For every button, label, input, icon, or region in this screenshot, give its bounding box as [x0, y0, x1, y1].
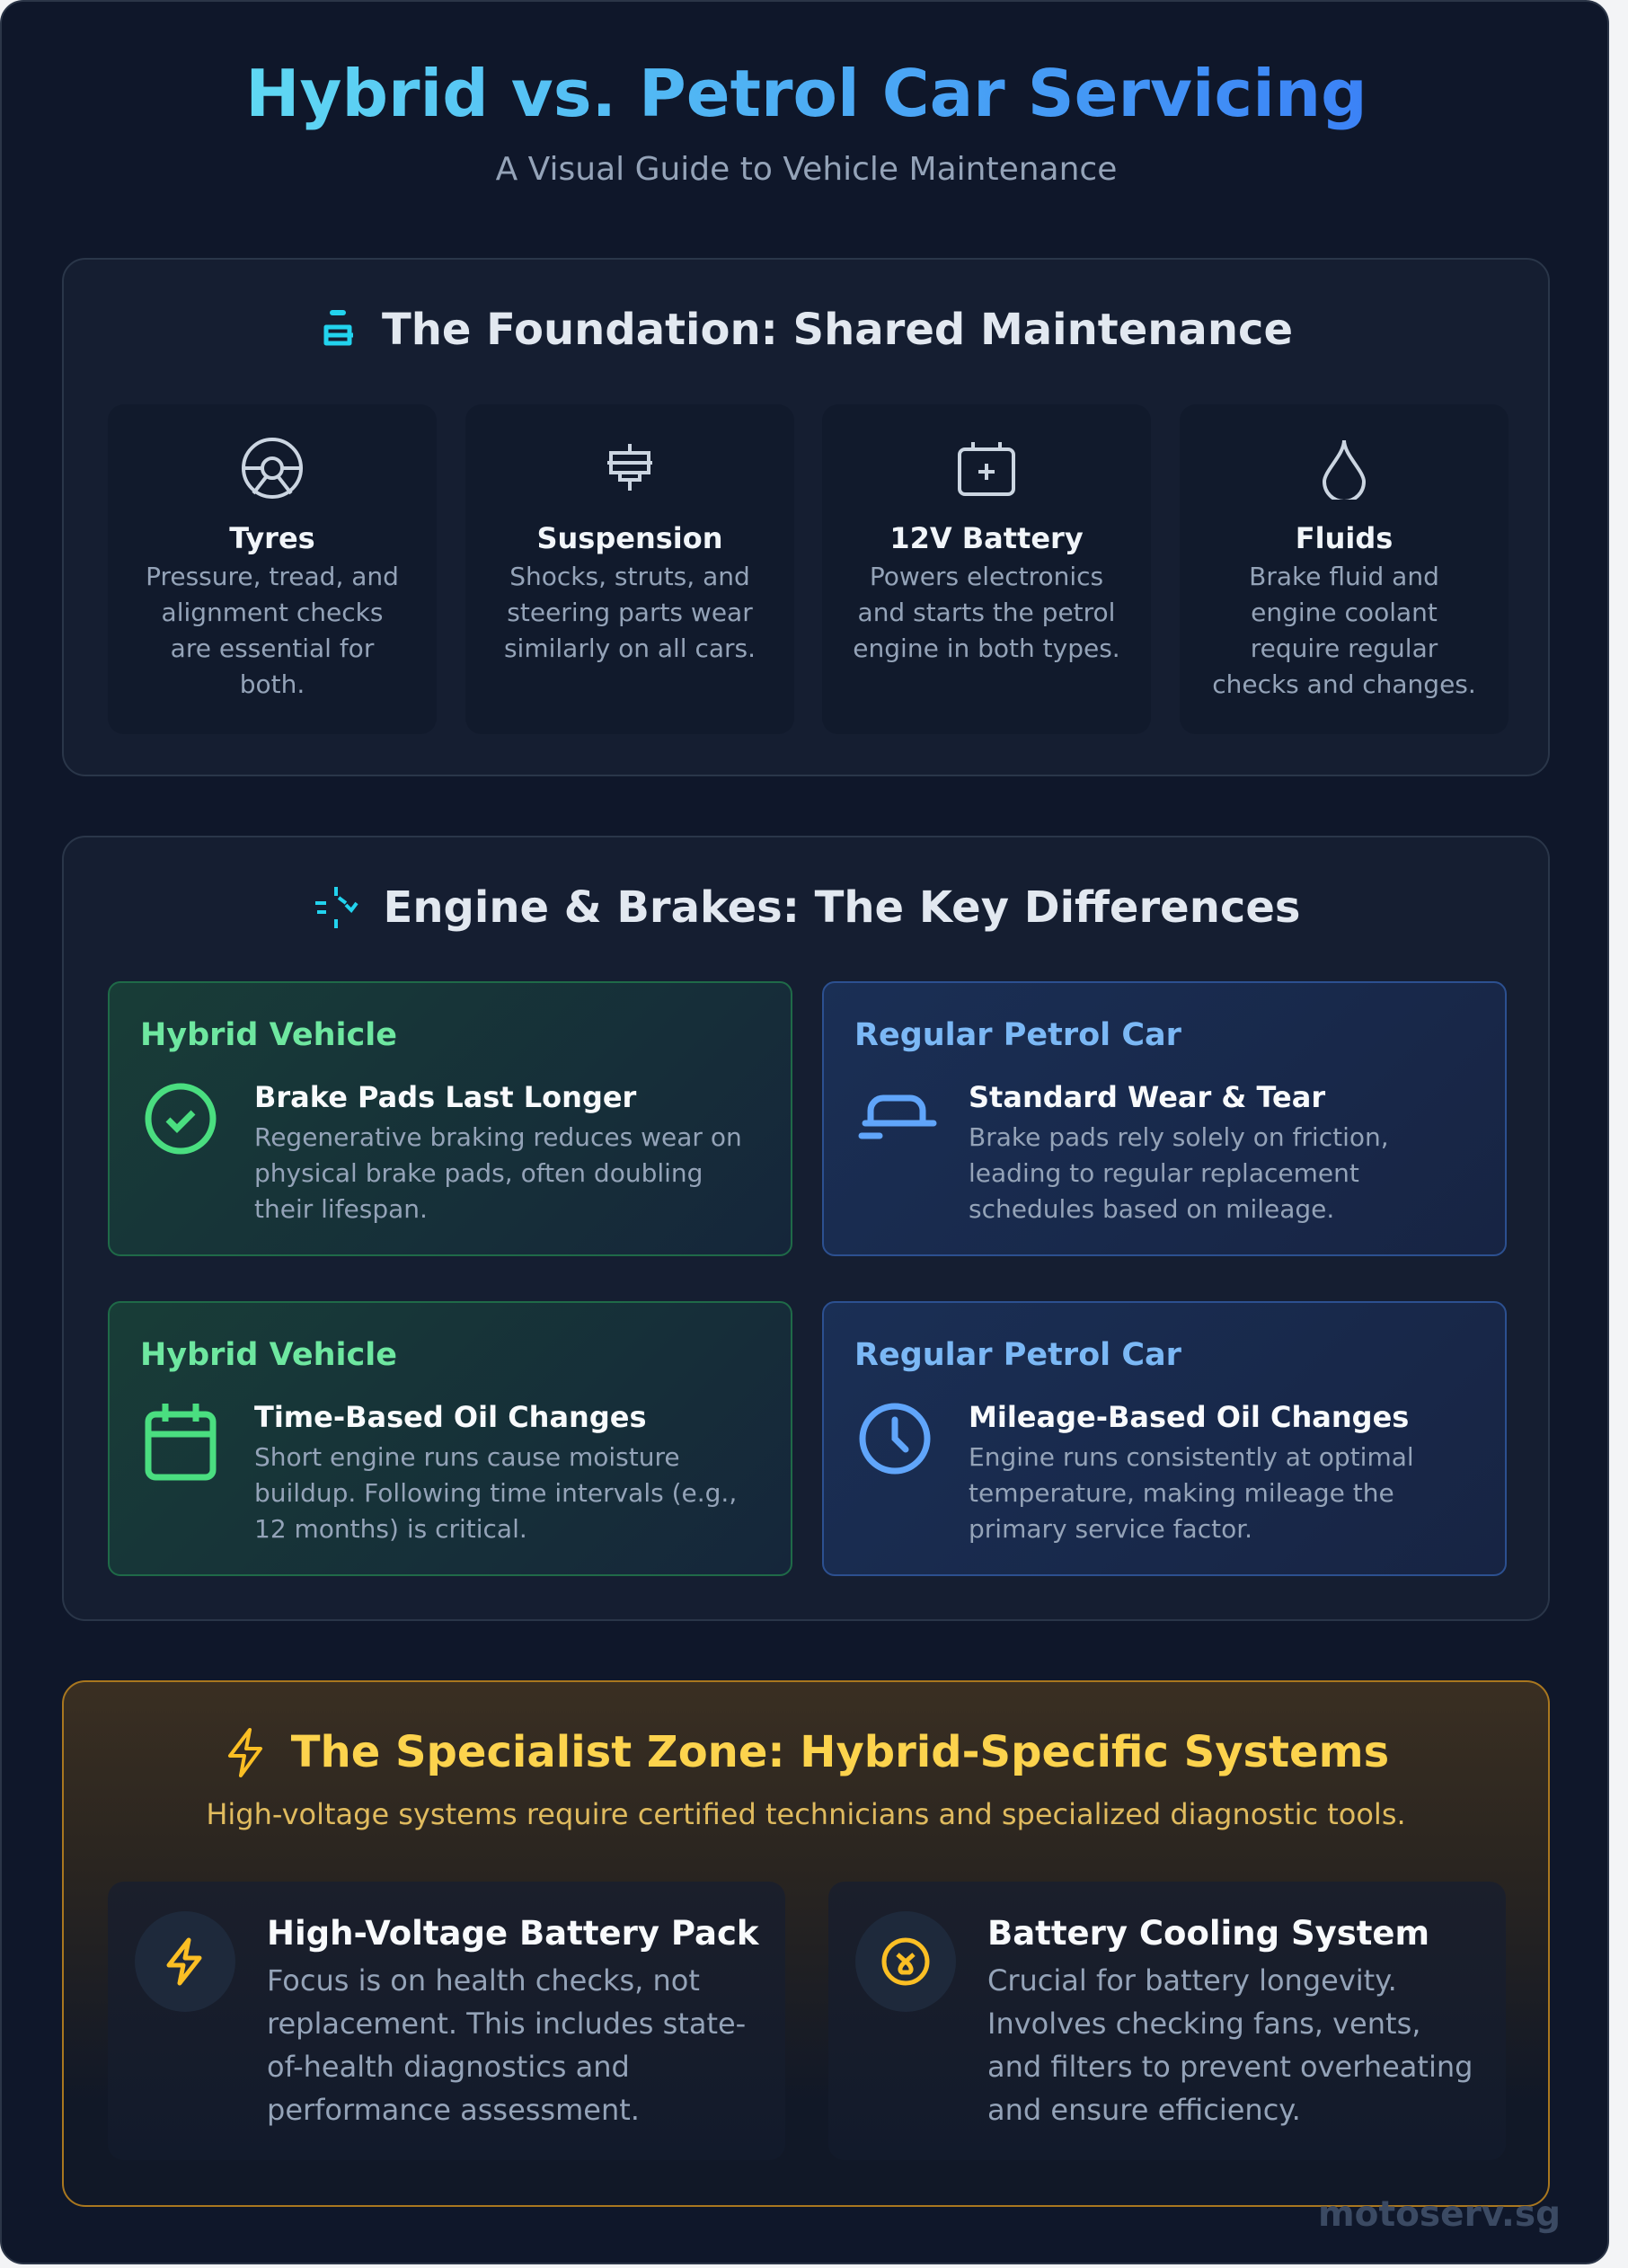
- card: fluids: Brake fluid and engine coolant require regular checks and changes.: [1212, 562, 1476, 699]
- card: 12V battery: 12V Battery: [889, 521, 1084, 555]
- icon: brake pad: [859, 1094, 936, 1139]
- card: fluids: Fluids: [1296, 521, 1393, 555]
- card: petrol brakes: [822, 981, 1507, 1256]
- card: suspension: Suspension: [536, 521, 723, 555]
- panel: key differences: [62, 836, 1550, 1621]
- card: hybrid oil: Hybrid Vehicle: [140, 1337, 397, 1373]
- card: cooling: Battery Cooling System: [987, 1914, 1429, 1953]
- card: cooling: [828, 1882, 1506, 2160]
- card: hybrid oil: Time-Based Oil Changes: [254, 1400, 646, 1434]
- panel: specialist zone: [62, 1680, 1550, 2207]
- watermark: motoserv.sg: [1318, 2194, 1561, 2235]
- card: hybrid brakes: Hybrid Vehicle: [140, 1017, 397, 1053]
- heading: specialist: The Specialist Zone: Hybrid-Specific Systems: [291, 1727, 1389, 1777]
- card: hybrid oil: [108, 1301, 792, 1576]
- icon: calendar: [146, 1404, 216, 1481]
- card: fluids: [1180, 404, 1509, 734]
- card: petrol oil: Mileage-Based Oil Changes: [969, 1400, 1409, 1434]
- card: HV battery: [108, 1882, 785, 2160]
- icon: clock: [859, 1404, 931, 1474]
- card: petrol brakes: Standard Wear & Tear: [969, 1080, 1325, 1114]
- card: tyres: [108, 404, 437, 734]
- card: petrol brakes: Brake pads rely solely on friction, leading to regular replacement schedules based on mileage.: [969, 1122, 1389, 1224]
- card: hybrid oil: Short engine runs cause moisture buildup. Following time intervals (e.g., 12 months) is critical.: [254, 1442, 737, 1544]
- card: cooling: Crucial for battery longevity. Involves checking fans, vents, and filters to prevent overheating and ensure efficiency.: [987, 1963, 1473, 2127]
- panel: shared maintenance: [62, 258, 1550, 776]
- card: HV battery: Focus is on health checks, not replacement. This includes state-of-health diagnostics and performance assessment.: [267, 1963, 746, 2127]
- subtitle: A Visual Guide to Vehicle Maintenance: [496, 151, 1117, 188]
- heading: foundation: The Foundation: Shared Maintenance: [382, 305, 1293, 355]
- card: petrol oil: Regular Petrol Car: [854, 1337, 1181, 1373]
- card: hybrid brakes: Brake Pads Last Longer: [254, 1080, 636, 1114]
- card: hybrid brakes: Regenerative braking reduces wear on physical brake pads, often doubling their lifespan.: [254, 1122, 742, 1224]
- card: suspension: [465, 404, 794, 734]
- card: petrol brakes: Regular Petrol Car: [854, 1017, 1181, 1053]
- card: suspension: Shocks, struts, and steering parts wear similarly on all cars.: [504, 562, 756, 663]
- card: petrol oil: [822, 1301, 1507, 1576]
- card: tyres: Tyres: [229, 521, 315, 555]
- card: 12V battery: Powers electronics and starts the petrol engine in both types.: [853, 562, 1120, 663]
- card: 12V battery: [822, 404, 1151, 734]
- card: petrol oil: Engine runs consistently at optimal temperature, making mileage the primary service factor.: [969, 1442, 1414, 1544]
- heading: engine & brakes: Engine & Brakes: The Key Differences: [384, 882, 1300, 933]
- card: hybrid brakes: [108, 981, 792, 1256]
- card: HV battery: High-Voltage Battery Pack: [267, 1914, 758, 1953]
- icon: check circle: [146, 1084, 216, 1154]
- subtitle: specialist: High-voltage systems require certified technicians and specialized diagnostic tools.: [206, 1797, 1406, 1831]
- card: tyres: Pressure, tread, and alignment checks are essential for both.: [146, 562, 399, 699]
- title: Hybrid vs. Petrol Car Servicing: [245, 56, 1367, 131]
